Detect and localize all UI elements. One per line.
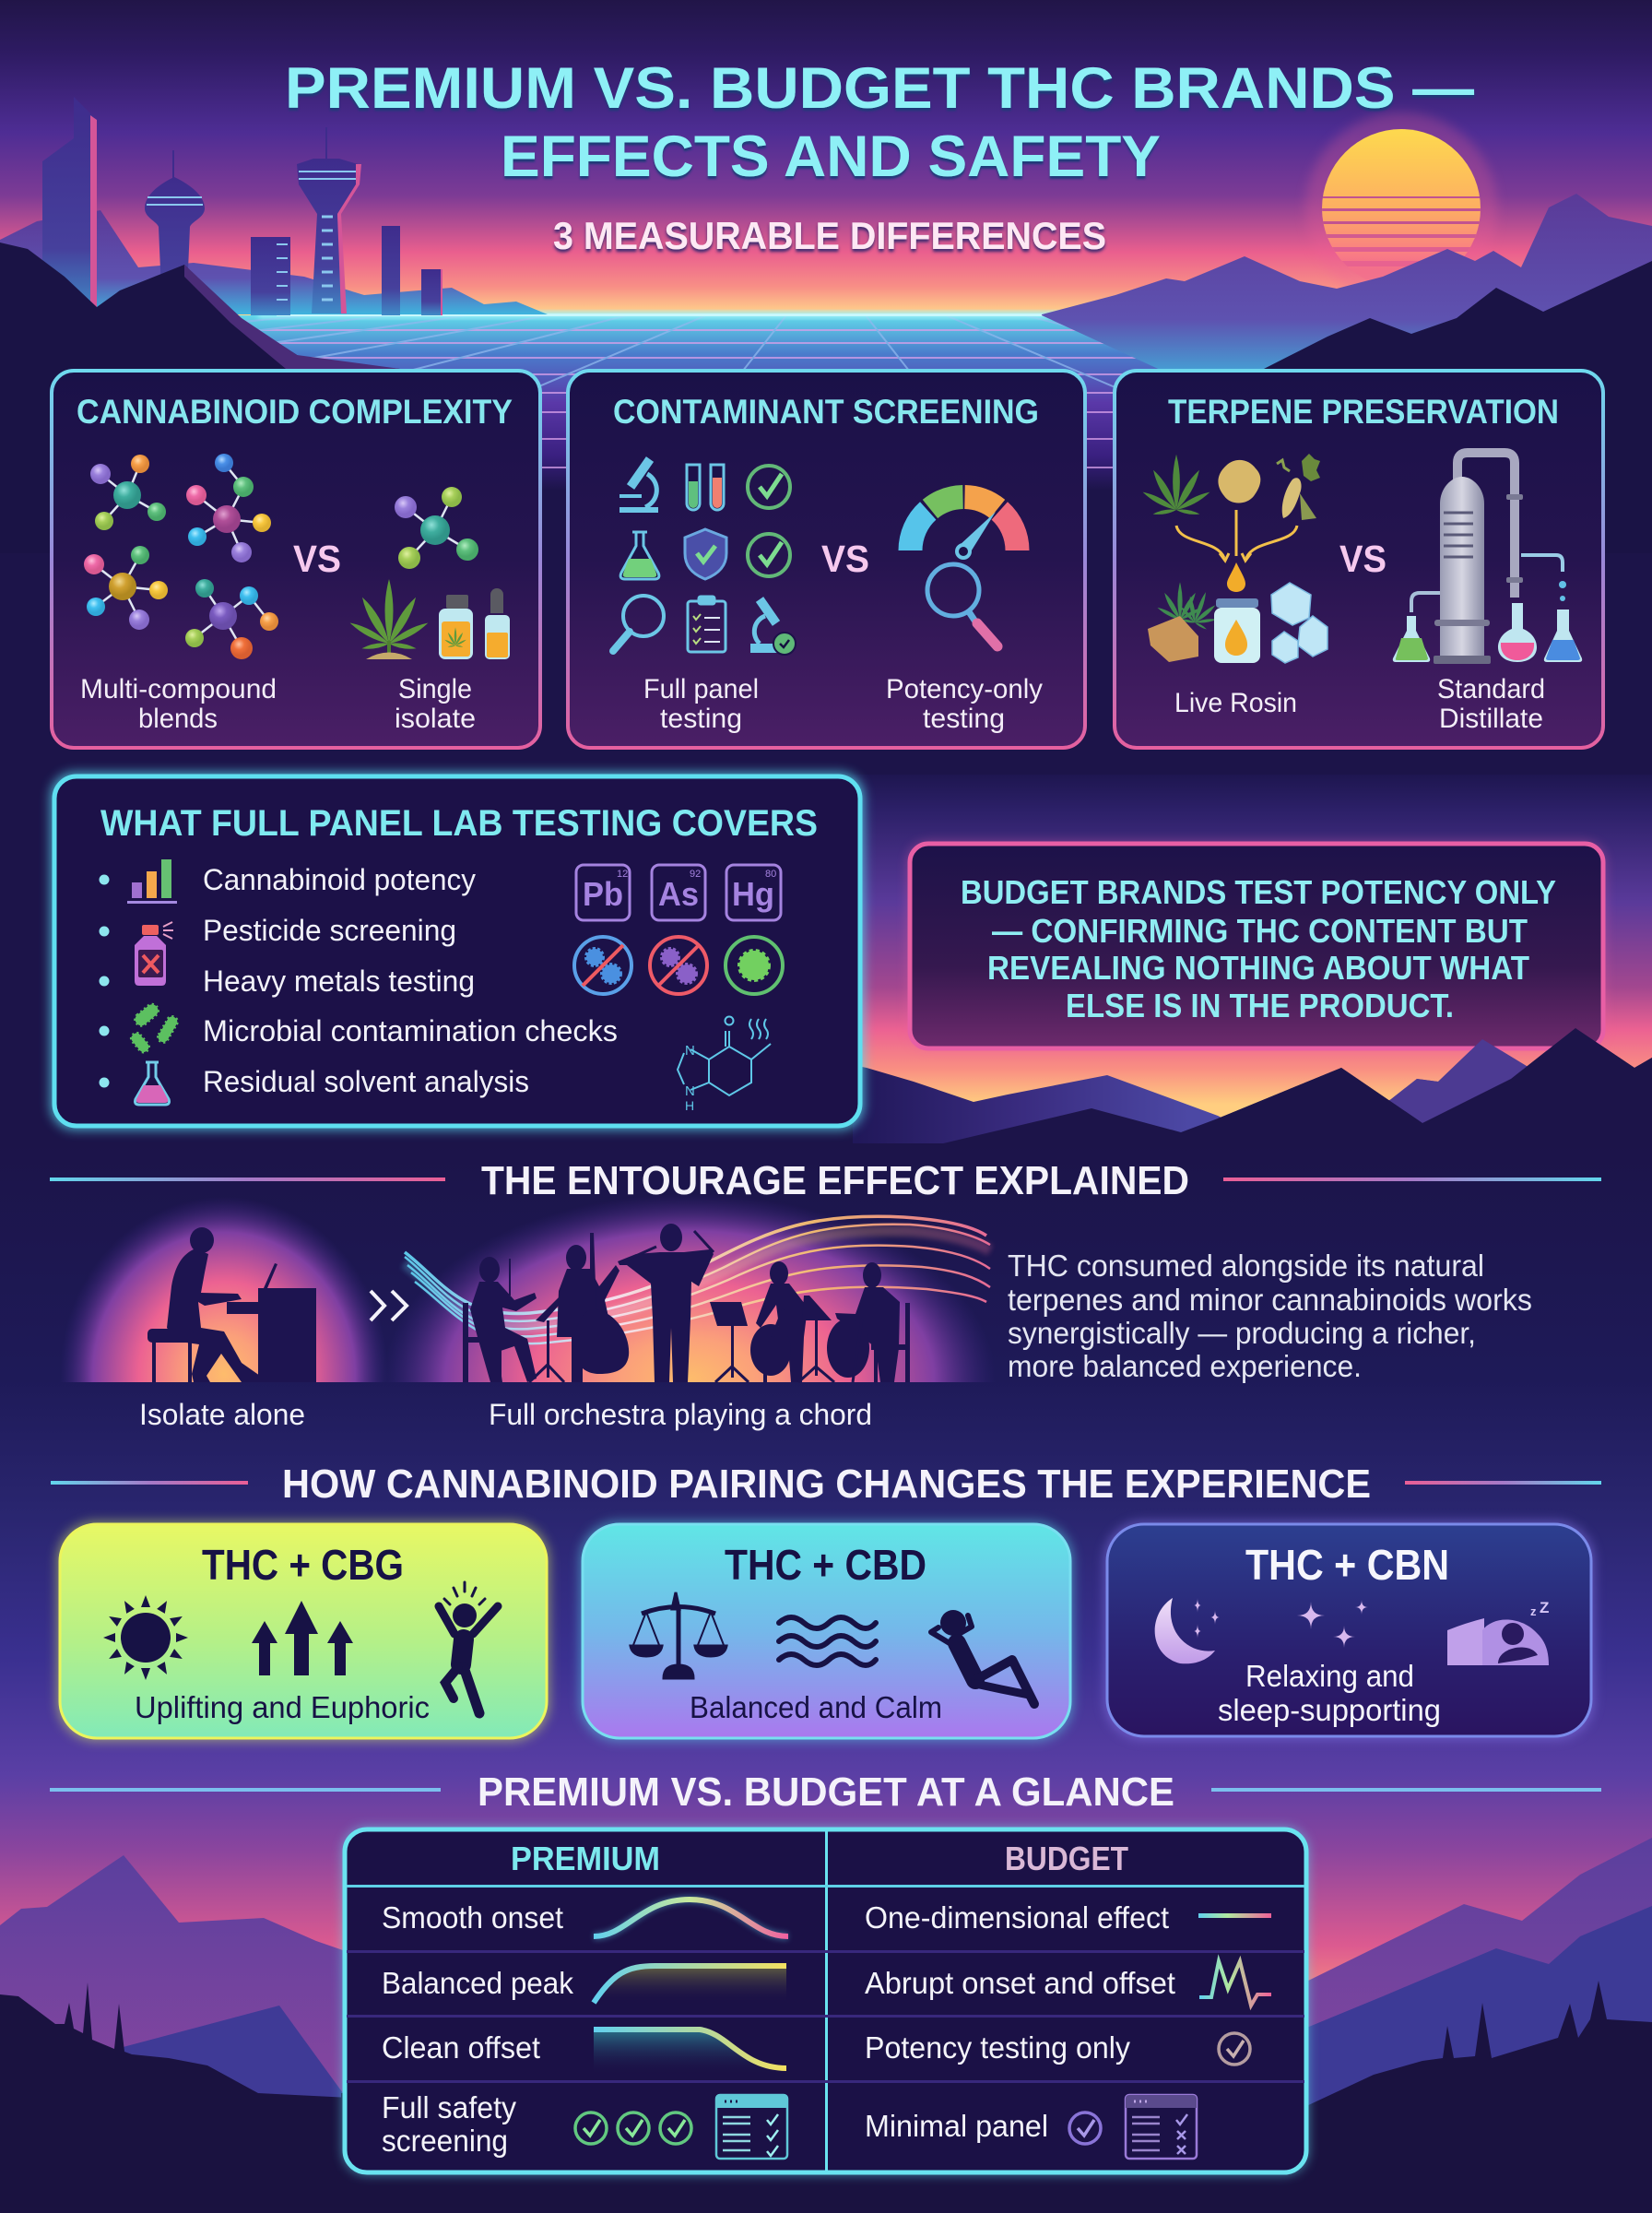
background: dark peaks overlapping callout	[1218, 1028, 1652, 1162]
bullets	[100, 874, 109, 1088]
label: relaxing and sleep-supporting: sleep-supporting	[1218, 1693, 1441, 1727]
icon: minimal checklist window	[1126, 2095, 1197, 2159]
chart: balanced peak curve	[594, 1966, 786, 2003]
background: left foreground mountains	[0, 243, 400, 553]
illustration: piano soloist	[66, 1202, 383, 1382]
icon: heavy metal elements: 12	[617, 869, 628, 880]
panel: THC + CBD	[580, 1521, 1073, 1741]
icon: clipboard	[688, 597, 726, 652]
panel: THC + CBG	[57, 1521, 549, 1741]
panel: comparison table	[343, 1828, 1308, 2174]
icon: magnifier	[613, 596, 664, 651]
icon: heavy metal elements: 92	[690, 869, 701, 880]
background: purple mid mountains	[853, 1065, 1272, 1148]
icon: dancing figure	[439, 1582, 498, 1713]
icon: calm waves	[779, 1617, 876, 1665]
vs label: VS	[293, 538, 341, 580]
background: lower right blue ridge	[1304, 1906, 1652, 2121]
text block: entourage explanation: terpenes and minor cannabinoids works	[1008, 1283, 1532, 1317]
icon: live rosin ingredients	[1141, 454, 1320, 520]
section header: cannabinoid pairing: HOW CANNABINOID PAIRING CHANGES THE EXPERIENCE	[282, 1462, 1371, 1507]
heading: THC + CBD: THC + CBD	[725, 1541, 926, 1589]
background: lower left purple mountain	[0, 1855, 343, 2121]
heading: THC + CBG: THC + CBG	[202, 1541, 404, 1589]
column header: budget: BUDGET	[1005, 1840, 1128, 1877]
background: lower left dark ridge and trees	[0, 1982, 350, 2213]
label: standard distillate: Distillate	[1439, 704, 1543, 734]
icon: chemical structure	[678, 1016, 771, 1113]
heading: THC + CBN: THC + CBN	[1245, 1541, 1449, 1589]
vs label: VS	[1339, 538, 1386, 580]
background: mountains overlapping callout	[1391, 1039, 1529, 1123]
background: top sunset sky	[0, 0, 1652, 315]
icon: distillation apparatus	[1393, 453, 1582, 664]
icon: retro sun	[1305, 112, 1497, 304]
column header: premium: PREMIUM	[511, 1840, 660, 1877]
background: neon grid floor	[238, 310, 1158, 485]
icon: crescent moon	[1155, 1598, 1215, 1663]
label: uplifting and euphoric: Uplifting and Euphoric	[135, 1690, 430, 1724]
panel: contaminant screening	[568, 371, 1085, 748]
background: lower page gradient	[0, 1143, 1652, 2213]
heading: lab testing: WHAT FULL PANEL LAB TESTING COVERS	[100, 803, 818, 844]
premium rows text: Smooth onset	[382, 1900, 563, 1935]
icon: single tan check	[1219, 2033, 1250, 2065]
title: PREMIUM VS. BUDGET THC BRANDS —	[285, 56, 1474, 121]
title	[285, 56, 1474, 189]
light waves	[405, 1216, 990, 1343]
icon: pesticide spray bottle	[135, 922, 173, 986]
list: lab coverage items: Heavy metals testing	[203, 964, 475, 998]
callout: budget brands warning: BUDGET BRANDS TEST POTENCY ONLY	[961, 873, 1556, 911]
icon: up arrows	[252, 1601, 353, 1675]
icon: three green checks	[575, 2112, 691, 2144]
icon: sleeping person	[1447, 1599, 1549, 1665]
background: lower right dark ridge and trees	[1304, 1981, 1652, 2213]
text block: entourage explanation: THC consumed alongside its natural	[1008, 1249, 1484, 1283]
icon: retro city skyline	[42, 97, 442, 315]
background: dark foreground mountains	[939, 1028, 1652, 1162]
icon: heavy metal elements: Hg	[732, 875, 774, 913]
label: multi-compound blends: Multi-compound	[80, 674, 277, 704]
icon: single isolate molecule	[395, 487, 478, 569]
icon: full checklist window	[716, 2095, 787, 2159]
icon: reclining figure	[931, 1610, 1034, 1704]
panel: THC + CBN	[1104, 1521, 1594, 1739]
list: lab coverage items: Residual solvent analysis	[203, 1065, 529, 1098]
icon: magnifier	[927, 564, 997, 646]
chart: abrupt onset spike	[1199, 1961, 1271, 2006]
vs label: VS	[821, 538, 869, 580]
icon: heavy metal elements	[576, 865, 781, 920]
label: full panel testing: testing	[660, 704, 742, 734]
callout: budget brands warning: ELSE IS IN THE PRODUCT.	[1066, 987, 1454, 1024]
label: single isolate	[395, 674, 476, 734]
label: potency-only testing: Potency-only	[886, 674, 1043, 704]
icon: sleeping person: z	[1530, 1604, 1537, 1618]
icon: microscope	[620, 459, 658, 513]
text block: entourage explanation: more balanced experience.	[1008, 1349, 1362, 1383]
icon: multi-compound molecules	[84, 454, 278, 659]
icon: shield	[685, 529, 726, 579]
budget rows text: Potency testing only	[865, 2030, 1130, 2065]
icon: heavy metal elements: 80	[765, 869, 776, 880]
label: full orchestra: Full orchestra playing a chord	[489, 1398, 872, 1431]
label: standard distillate: Standard	[1437, 674, 1545, 704]
background: middle sunset sky	[853, 775, 1652, 1130]
icon: chemical structure: N	[685, 1083, 695, 1099]
subtitle: 3 MEASURABLE DIFFERENCES	[553, 214, 1106, 257]
section header: entourage effect: THE ENTOURAGE EFFECT EXPLAINED	[481, 1158, 1189, 1203]
icon: bar chart	[127, 859, 177, 904]
chart: smooth onset curve	[594, 1899, 788, 1936]
label: full panel testing	[643, 674, 759, 734]
background: lower left blue ridge	[116, 2006, 343, 2121]
section header: at a glance	[50, 1769, 1601, 1815]
premium rows text: Full safety	[382, 2090, 516, 2124]
icon: ice cubes	[1271, 583, 1328, 663]
text block: entourage explanation: synergistically — producing a richer,	[1008, 1316, 1476, 1350]
background: right foreground mountains	[1254, 261, 1652, 553]
label: potency-only testing: testing	[923, 704, 1005, 734]
icon: check circle	[748, 534, 790, 576]
label: balanced and calm: Balanced and Calm	[690, 1690, 942, 1724]
icon: test tubes	[687, 465, 724, 510]
icon: heavy metal elements: Pb	[583, 875, 623, 913]
budget rows text: Minimal panel	[865, 2109, 1048, 2143]
label: relaxing and sleep-supporting	[1218, 1659, 1441, 1727]
icon: rosin drop	[1227, 562, 1245, 592]
icon: cannabis plant and bottles	[348, 579, 510, 659]
heading: terpene preservation: TERPENE PRESERVATION	[1168, 393, 1559, 431]
label: standard distillate	[1437, 674, 1545, 734]
premium rows text: Clean offset	[382, 2030, 540, 2065]
icon: solvent flask	[135, 1062, 170, 1105]
label: single isolate: Single	[398, 674, 472, 704]
background: dark base under table	[341, 2093, 1305, 2213]
arrows: extraction flow	[1176, 510, 1297, 561]
background: left distant hills	[0, 210, 548, 314]
list: lab coverage items: Microbial contamination checks	[203, 1014, 618, 1047]
budget rows text: One-dimensional effect	[865, 1900, 1169, 1935]
icon: sleeping person: Z	[1540, 1599, 1549, 1616]
callout: budget brands warning: REVEALING NOTHING ABOUT WHAT	[987, 949, 1529, 987]
label: relaxing and sleep-supporting: Relaxing and	[1245, 1659, 1414, 1693]
list: lab coverage items: Pesticide screening	[203, 914, 456, 947]
icon: no-microbe circles	[574, 937, 783, 994]
premium rows text: screening	[382, 2124, 508, 2158]
panel: full panel lab testing	[51, 773, 864, 1130]
label: full panel testing: Full panel	[643, 674, 759, 704]
icon: microscope with check	[750, 599, 796, 655]
icon: herbs and wood	[1148, 582, 1225, 662]
icon: flask	[620, 532, 659, 579]
budget rows text	[865, 1900, 1175, 2143]
icon: potency gauge	[911, 497, 1018, 558]
icon: chemical structure: N	[685, 1043, 695, 1059]
heading: contaminant screening: CONTAMINANT SCREENING	[613, 393, 1039, 431]
label: isolate alone: Isolate alone	[139, 1398, 305, 1431]
chart: clean offset curve	[594, 2030, 786, 2075]
callout: budget brands warning: — CONFIRMING THC CONTENT BUT	[992, 912, 1528, 950]
background: right purple mountains	[1042, 194, 1652, 387]
panel: cannabinoid complexity	[52, 371, 540, 748]
icon: single purple check	[1069, 2112, 1101, 2144]
list: lab coverage items	[203, 863, 618, 1098]
illustration: full orchestra	[395, 1200, 994, 1383]
callout: budget brands warning	[908, 842, 1605, 1049]
premium rows text	[382, 1900, 573, 2158]
budget rows text: Abrupt onset and offset	[865, 1966, 1175, 2000]
section header: entourage effect	[50, 1158, 1601, 1203]
title: EFFECTS AND SAFETY	[501, 124, 1161, 189]
label: live rosin: Live Rosin	[1174, 688, 1297, 718]
arrow: chevrons	[371, 1291, 407, 1320]
icon: chemical structure: H	[685, 1098, 694, 1113]
icon: heavy metal elements: As	[658, 875, 699, 913]
premium rows text: Balanced peak	[382, 1966, 573, 2000]
label: single isolate: isolate	[395, 704, 476, 734]
icon: balance scale	[631, 1592, 726, 1678]
icon: bacteria	[129, 1002, 179, 1054]
heading: cannabinoid complexity: CANNABINOID COMPLEXITY	[77, 393, 513, 431]
label: potency-only testing	[886, 674, 1043, 734]
icon: sparkles	[1194, 1598, 1368, 1648]
text block: entourage explanation	[1008, 1249, 1532, 1383]
icon: check circle	[748, 466, 790, 508]
background: lower right purple mountain	[1304, 1838, 1652, 2121]
icon: rosin jar	[1214, 598, 1260, 663]
section header: at a glance: PREMIUM VS. BUDGET AT A GLANCE	[478, 1769, 1174, 1815]
chart: one-dimensional line	[1198, 1913, 1271, 1918]
list: lab coverage items: Cannabinoid potency	[203, 863, 476, 896]
label: multi-compound blends	[80, 674, 277, 734]
label: multi-compound blends: blends	[138, 704, 218, 734]
panel: terpene preservation	[1115, 371, 1603, 748]
background: back right peak	[1346, 1039, 1549, 1125]
icon: sun	[103, 1595, 188, 1680]
